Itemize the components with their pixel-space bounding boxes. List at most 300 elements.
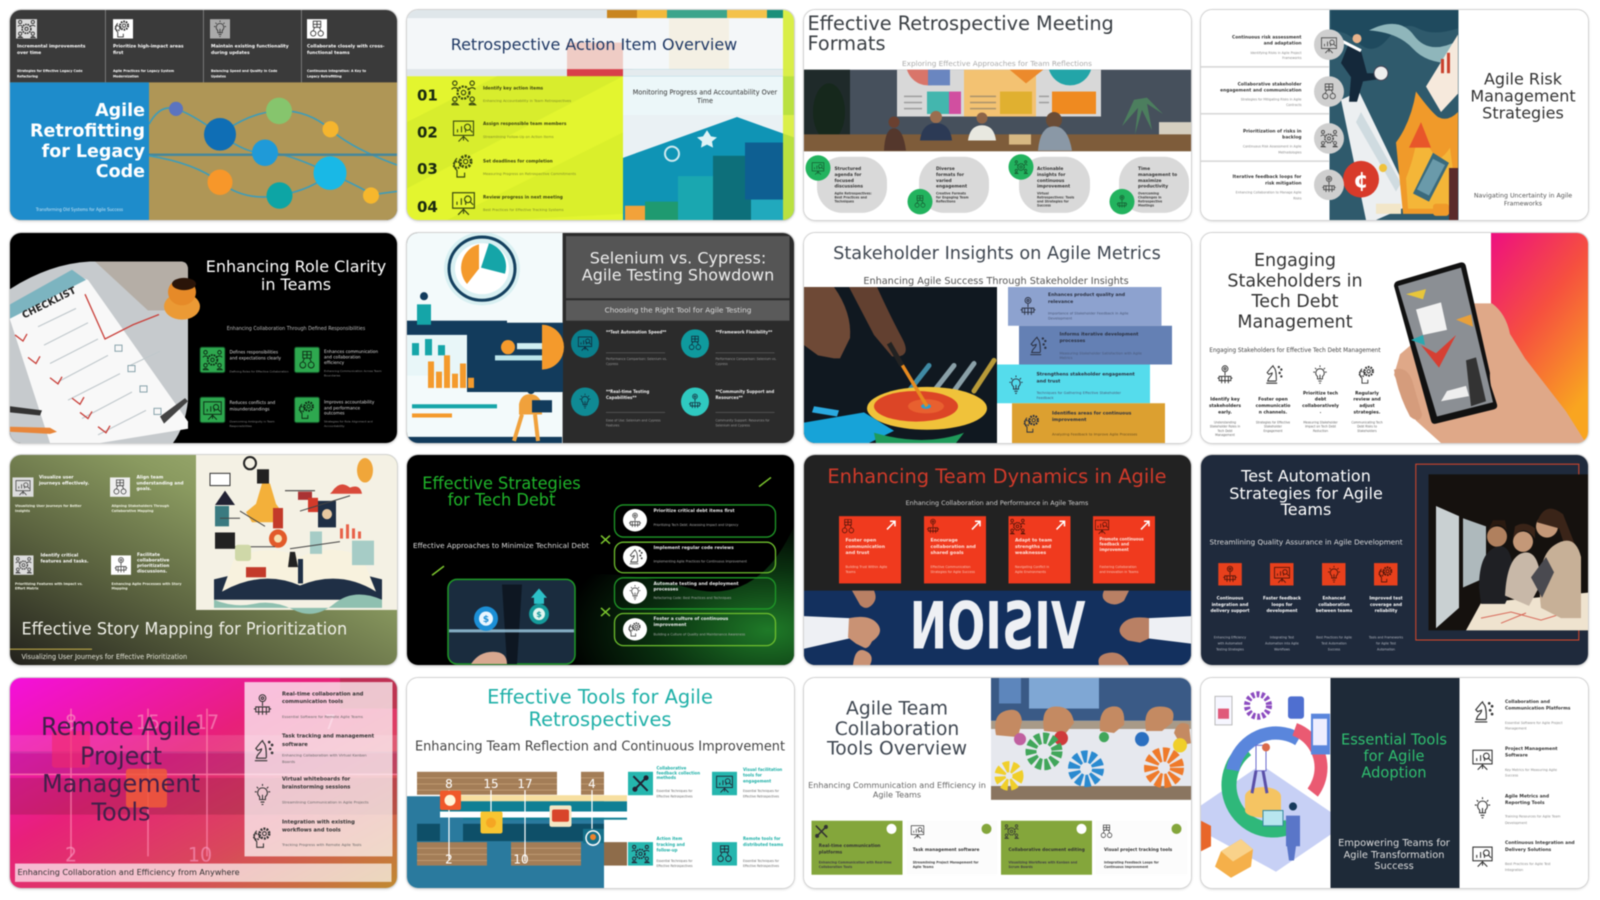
list: retrospective tools: Effective Retrospectives	[656, 794, 693, 798]
section: comparison points: Community Support: Resources for	[716, 418, 770, 422]
section: four format cards: insights for	[1037, 172, 1066, 178]
section: collaboration tool cards: Real-time communication	[819, 843, 880, 849]
list: risk strategies: Enhancing Collaboration to Manage Agile	[1236, 190, 1302, 195]
list: debt strategies: Automate testing and deployment	[653, 581, 740, 587]
section: collaboration tool cards: Collaboration Tools	[819, 865, 852, 869]
list: tool categories: Key Metrics for Measuring Agile	[1505, 767, 1557, 771]
list: risk strategies: Strategies for Mitigating Risks in Agile	[1241, 98, 1302, 102]
section: team dynamics cards: improvement	[1100, 547, 1129, 552]
list: insight blocks: and trust	[1036, 378, 1061, 384]
section: four format cards: management to	[1138, 172, 1177, 178]
callout: monitoring progress	[623, 76, 783, 115]
section: comparison points: **Test Automation Speed**	[606, 329, 667, 334]
section: automation benefits: Test Automation	[1320, 642, 1347, 646]
title panel: Empowering Teams for	[1338, 838, 1451, 849]
list: tool categories	[1473, 698, 1575, 872]
list: risk strategies: and adaptation	[1264, 41, 1302, 47]
title: Tech Debt	[1251, 291, 1339, 311]
title panel: for Agile	[1363, 747, 1425, 765]
section: automation benefits	[1210, 563, 1403, 652]
list: remote tools	[244, 682, 392, 856]
list: tool categories: Project Management	[1505, 745, 1558, 751]
section: engagement steps: n channels.	[1259, 409, 1288, 415]
title	[422, 474, 581, 509]
list: story mapping practices: features and tasks.	[40, 559, 89, 565]
section: team dynamics cards: Navigating Conflict in	[1015, 565, 1049, 569]
list: story mapping practices: Insights	[15, 509, 30, 513]
panel: Agile Risk Management Strategies	[1201, 10, 1588, 220]
list: debt strategies: Foster a culture of continuous	[653, 616, 729, 622]
list: story mapping practices: journeys effectively.	[38, 481, 89, 487]
list: remote tools: Virtual whiteboards for	[282, 776, 351, 782]
section: collaboration tool cards	[812, 820, 1187, 874]
section: team dynamics cards: Teams	[845, 570, 856, 574]
list: story mapping practices: Prioritizing Features with Impact vs.	[15, 582, 83, 586]
subtitle: Enhancing Agile Success Through Stakeholder Insights	[863, 275, 1129, 286]
list: debt strategies	[614, 505, 776, 646]
section: responsibilities grid: Defines responsibilities	[230, 349, 278, 354]
list: story mapping practices: Identify critical	[40, 552, 79, 558]
chart: connected nodes	[149, 98, 397, 209]
panel: Engaging Stakeholders in Tech Debt Management	[1201, 232, 1588, 442]
title: Strategies for Agile	[1229, 484, 1383, 503]
section: responsibilities grid: Improves accountability	[324, 399, 375, 404]
title: Management	[1237, 312, 1353, 332]
list: tool categories: Development	[1505, 820, 1528, 824]
list: remote tools: software	[282, 741, 308, 747]
list: story mapping practices: Aligning Stakeholders Through	[112, 504, 170, 508]
list: retrospective tools: Effective Retrospectives	[656, 863, 693, 867]
section: team dynamics cards: shared goals	[930, 550, 964, 556]
title: Teams	[1280, 500, 1331, 519]
list: insight blocks: Analyzing Feedback to Improve Agile Processes	[1052, 432, 1137, 436]
title: Collaboration	[835, 717, 959, 740]
list: story mapping practices: understanding and	[136, 481, 184, 487]
title panel: Adoption	[1361, 764, 1427, 781]
photo: mirrored vision board with hands	[804, 589, 1191, 665]
section: collaboration tool cards: Continuous Improvement	[1104, 865, 1149, 869]
section: responsibilities grid: Strategies for Role Alignment and	[324, 419, 373, 423]
photo: 3D bars	[623, 69, 794, 220]
section: collaboration tool cards: Streamlining Project Management for	[913, 860, 979, 864]
title	[1229, 466, 1383, 519]
title panel: Code	[96, 162, 145, 182]
section: four format cards: Best Practices and	[834, 196, 867, 200]
section: responsibilities grid: efficiency	[324, 359, 345, 365]
subtitle: Visualizing User Journeys for Effective Prioritization	[21, 653, 187, 661]
section: automation benefits: Enhancing Efficiency	[1214, 635, 1246, 640]
list: risk strategies: Methodologies	[1278, 151, 1302, 155]
list: risk strategies: risk mitigation	[1265, 180, 1302, 186]
photo: finance icons on suit	[448, 579, 575, 664]
section: responsibilities grid: and performance	[324, 405, 360, 410]
list: risk strategies: Contracts	[1286, 103, 1302, 107]
list: insight blocks: Measuring Stakeholder Satisfaction with Agile	[1059, 351, 1143, 355]
list: story mapping practices: Enhancing Agile Processes with Story	[112, 582, 182, 586]
section: key practices strip: during updates	[211, 50, 250, 56]
list: retrospective tools: engagement	[743, 778, 771, 783]
section: key practices strip: Incremental improvements	[17, 44, 86, 50]
title: Management	[42, 769, 200, 798]
section: collaboration tool cards: Scrum Boards	[1008, 865, 1033, 869]
section: key practices strip: Strategies for Effective Legacy Code	[17, 69, 83, 73]
section: automation benefits: with Automated	[1218, 642, 1242, 646]
section: responsibilities grid: Defining Roles for Effective Collaboration	[230, 369, 289, 373]
section: responsibilities grid: Enhancing Communication Across Team	[324, 369, 382, 373]
section: engagement steps: Impact on Tech Debt	[1305, 424, 1337, 428]
section: team dynamics cards: collaboration and	[930, 544, 976, 550]
list: retrospective tools: tools for	[743, 772, 762, 777]
illustration: risk collage	[1330, 10, 1458, 220]
section: automation benefits: Enhanced	[1323, 596, 1345, 601]
section: responsibilities grid: and expectations clearly	[230, 355, 282, 360]
list: story mapping practices: collaborative	[137, 557, 169, 564]
section: comparison points: **Framework Flexibility**	[716, 329, 773, 334]
subtitle panel	[566, 300, 790, 320]
list: retrospective tools: Action item	[656, 836, 682, 841]
section: four format cards: engagement	[936, 183, 968, 189]
gradient accent	[1491, 232, 1588, 442]
section: responsibilities grid: and collaboration	[324, 354, 361, 359]
illustration: analyst and dashboards	[407, 231, 564, 442]
section: four format cards: Time	[1138, 166, 1150, 172]
section: four format cards: Retrospective	[1138, 200, 1162, 204]
list: retrospective tools: tracking and	[656, 841, 685, 847]
list: tool categories: Training Resources for Agile Team	[1504, 814, 1560, 818]
section: engagement steps: communicatio	[1256, 402, 1290, 408]
section: team dynamics cards: Fostering Collaboration	[1100, 565, 1137, 569]
list: story mapping practices: Facilitate	[137, 552, 160, 558]
list: risk strategies: Frameworks	[1282, 56, 1302, 60]
illustration: checklist on desk	[10, 261, 200, 442]
section: engagement steps: Identify key	[1210, 396, 1240, 402]
panel: Selenium vs. Cypress	[407, 232, 794, 442]
title panel: Essential Tools	[1341, 731, 1447, 748]
timeline graphic: 10	[513, 852, 529, 866]
title	[1470, 69, 1576, 123]
section: four format cards: formats for	[936, 172, 965, 178]
list: retrospective tools: Essential Techniques for	[743, 789, 780, 793]
title band: Retrospective Action Item Overview	[451, 35, 737, 54]
section: comparison points: Cypress	[716, 361, 728, 366]
section: four format cards: improvement	[1037, 183, 1071, 189]
section: responsibilities grid: Enhances communication	[324, 348, 378, 353]
title: Tools Overview	[826, 737, 967, 759]
photo: finance icons on suit: $	[536, 610, 542, 619]
list: remote tools: Task tracking and management	[282, 733, 375, 739]
title: Effective Tools for Agile	[487, 685, 713, 708]
section: automation benefits: for Agile Test	[1376, 642, 1397, 646]
background: timeline pattern: 8	[65, 710, 77, 734]
list: tool categories: Integration	[1505, 868, 1523, 872]
list: risk strategies: Collaborative stakeholder	[1238, 81, 1302, 87]
panel: Retrospective Action Item Overview	[407, 10, 794, 220]
title: Management	[1470, 87, 1576, 106]
panel: Stakeholder Insights on Agile Metrics	[804, 232, 1191, 442]
list: remote tools: brainstorming sessions	[282, 784, 350, 790]
list: story mapping practices: Align team	[136, 474, 164, 480]
list: story mapping practices: Visualize user	[39, 474, 74, 480]
section: four format cards: continuous	[1037, 178, 1065, 184]
title: Effective Story Mapping for Prioritization	[21, 619, 347, 638]
section: four format cards: Techniques	[834, 200, 854, 204]
section: key practices strip: functional teams	[307, 50, 350, 56]
section: team dynamics cards: Promote continuous	[1100, 537, 1144, 542]
subtitle	[808, 780, 986, 799]
list: tool categories: Reporting Tools	[1505, 799, 1545, 805]
illustration: open book of ideas	[196, 455, 397, 614]
panel: Effective Strategies for Tech Debt	[407, 455, 794, 665]
section: collaboration tool cards: Task management software	[913, 846, 979, 852]
title: Strategies	[1482, 103, 1564, 123]
list: debt strategies: Prioritizing Tech Debt: Assessing Impact and Urgency	[653, 523, 738, 527]
caption strip: Enhancing Collaboration and Efficiency from Anywhere	[18, 867, 240, 877]
list: action items: 02	[417, 123, 438, 141]
section: four format cards: focused	[834, 178, 854, 184]
list: retrospective tools: Effective Retrospectives	[743, 863, 779, 867]
section: engagement steps: Management	[1215, 432, 1236, 436]
list: retrospective tools: follow-up	[656, 847, 678, 852]
photo: finance icons on suit: $	[483, 615, 489, 625]
section: team dynamics cards: weaknesses	[1015, 550, 1046, 556]
background: timeline pattern	[10, 678, 397, 866]
background: timeline pattern: 2	[65, 843, 77, 866]
list: debt strategies: processes	[653, 587, 679, 593]
section: four format cards: Diverse	[936, 166, 955, 172]
section: four format cards: and Strategies for	[1037, 200, 1069, 204]
title: Retrospectives	[528, 707, 672, 730]
title panel	[1330, 678, 1460, 888]
list: retrospective tools: Essential Techniques for	[656, 858, 693, 863]
background: timeline pattern: 17	[195, 710, 219, 734]
section: comparison points: Features	[606, 423, 620, 427]
list: retrospective tools: Remote tools for	[743, 836, 781, 841]
list: story mapping practices: Collaborative Mapping	[112, 509, 154, 513]
title	[41, 712, 201, 826]
title: for Tech Debt	[448, 490, 556, 509]
section: team dynamics cards: Agile Environments	[1015, 570, 1046, 574]
section: engagement steps: Prioritize tech	[1303, 390, 1338, 396]
list: action items: Identify key action items	[483, 85, 544, 92]
list: remote tools: Tracking Progress with Remote Agile Tools	[281, 842, 361, 847]
title	[206, 257, 387, 294]
section: engagement steps: Measuring Stakeholder	[1303, 420, 1338, 424]
section: key practices strip: Refactoring	[17, 74, 39, 78]
title: in Teams	[261, 274, 331, 294]
subtitle: Enhancing Communication and Efficiency in	[808, 780, 986, 790]
illustration: isometric growth ring	[1201, 694, 1336, 877]
list: action items: 01	[417, 87, 438, 105]
section: engagement steps: Stakeholders	[1357, 428, 1377, 432]
title panel: Retrofitting	[30, 121, 145, 141]
list: insight blocks: Informs iterative development	[1059, 331, 1139, 337]
background: timeline pattern: 15	[136, 710, 160, 734]
section: automation benefits: Automation	[1377, 648, 1395, 652]
section: automation benefits: Success	[1328, 648, 1341, 652]
illustration: hand holding phone	[1394, 262, 1586, 442]
subtitle: Navigating Uncertainty in Agile	[1474, 193, 1572, 200]
list: insight blocks: Development	[1048, 316, 1073, 320]
section: engagement steps: Regularly	[1355, 390, 1379, 396]
section: four format cards: maximize	[1138, 178, 1162, 184]
title: Effective Retrospective Meeting	[808, 12, 1114, 35]
section: engagement steps: Communicating Tech	[1351, 420, 1383, 424]
list: tool categories: Agile Metrics and	[1505, 793, 1549, 799]
photo frame	[1416, 464, 1579, 640]
list: action items: Measuring Progress on Retrospective Commitments	[483, 172, 576, 176]
section: engagement steps: Foster open	[1258, 396, 1288, 402]
section: engagement steps: Reduction	[1313, 428, 1328, 432]
title band	[407, 18, 783, 69]
section: comparison points: Selenium and Cypress	[716, 423, 750, 427]
title panel: for Legacy	[42, 142, 145, 162]
section: automation benefits: Tools and Frameworks	[1368, 635, 1403, 640]
list: risk strategies: backlog	[1282, 134, 1302, 140]
section: engagement steps: .	[1320, 409, 1322, 414]
list: risk strategies: Continuous risk assessment	[1232, 35, 1302, 41]
panel: Test Automation Strategies for Agile Teams	[1201, 455, 1588, 665]
title panel	[10, 82, 149, 220]
photo: team at smart table	[1428, 474, 1588, 630]
timeline graphic: 15	[483, 776, 499, 791]
section: key practices strip: Prioritize high-impact areas	[113, 44, 184, 50]
list: insight blocks: improvement	[1052, 417, 1087, 423]
list: remote tools: Real-time collaboration and	[282, 691, 364, 697]
section: four format cards: Agile Retrospectives:	[834, 191, 872, 196]
list: insight blocks	[997, 287, 1172, 442]
title	[808, 12, 1114, 55]
subtitle: Enhancing Collaboration Through Defined Responsibilities	[227, 325, 366, 331]
list: tool categories: Communication Platforms	[1505, 705, 1571, 711]
section: engagement steps: Strategies for Effective	[1256, 420, 1290, 424]
photo: meeting room	[803, 68, 1192, 152]
list: story mapping practices: prioritization	[137, 563, 169, 569]
section: four format cards: Reflections	[936, 200, 956, 204]
list: story mapping practices: discussions.	[137, 569, 167, 575]
background glow	[537, 526, 794, 665]
section: team dynamics cards: feedback and	[1100, 542, 1129, 547]
list: insight blocks: Enhances product quality and	[1048, 292, 1125, 298]
section: engagement steps: Debt Risks to	[1357, 424, 1377, 428]
section: automation benefits: delivery support	[1210, 608, 1250, 613]
list: story mapping practices: goals.	[136, 486, 152, 492]
section: team dynamics cards: Building Trust Within Agile	[845, 565, 887, 569]
title: Remote Agile	[41, 712, 201, 741]
section: engagement steps: Engagement	[1263, 428, 1283, 432]
panel: Effective Tools for Agile Retrospectives	[407, 678, 794, 888]
panel: Agile Retrofitting for Legacy Code	[10, 10, 397, 220]
subtitle: Engaging Stakeholders for Effective Tech Debt Management	[1209, 347, 1381, 353]
title: Effective Strategies	[422, 474, 581, 493]
title: Enhancing Team Dynamics in Agile	[827, 465, 1167, 488]
list: risk strategies: Identifying Risks in Agile Project	[1250, 51, 1302, 55]
timeline graphic: 8	[445, 776, 453, 791]
timeline graphic: 2	[445, 852, 453, 866]
section: collaboration tool cards: Visual project tracking tools	[1104, 846, 1173, 852]
title: Stakeholder Insights on Agile Metrics	[833, 242, 1161, 264]
list: debt strategies: Implement regular code reviews	[653, 545, 734, 551]
list: tool categories: Collaboration and	[1505, 698, 1550, 704]
section: key practices strip: Continuous Integration: A Key to	[307, 69, 367, 73]
section: engagement steps: adjust	[1359, 402, 1376, 408]
photo: hand pointing at target chart	[804, 287, 997, 442]
section: key practices strip	[16, 10, 385, 82]
list: retrospective tools: Effective Retrospectives	[743, 794, 779, 798]
section: four format cards: Retrospectives: Tools	[1037, 196, 1074, 200]
subtitle: Frameworks	[1504, 201, 1542, 208]
section: comparison points: Resources**	[716, 395, 744, 400]
section: engagement steps: review and	[1353, 396, 1381, 402]
section: comparison points: **Real-time Testing	[606, 389, 649, 394]
section: responsibilities grid: Reduces conflicts and	[230, 400, 276, 405]
section: engagement steps: debt	[1315, 396, 1327, 402]
section: team dynamics cards: communication	[845, 544, 885, 550]
section: four format cards: Actionable	[1037, 166, 1063, 172]
list: story mapping practices	[12, 474, 184, 591]
list: retrospective tools: Collaborative	[656, 765, 687, 770]
section: responsibilities grid	[200, 347, 382, 428]
section: responsibilities grid: Responsibilities	[230, 424, 252, 428]
section: responsibilities grid: misunderstandings	[230, 406, 270, 411]
section: responsibilities grid: Accountability	[324, 424, 345, 428]
title: Enhancing Role Clarity	[206, 257, 387, 276]
list: insight blocks: Feedback	[1036, 396, 1054, 400]
list: retrospective tools: feedback collection	[656, 770, 700, 775]
caption strip	[15, 863, 392, 881]
list: risk strategies: Prioritization of risks in	[1243, 128, 1302, 134]
title panel: Agile Transformation	[1344, 849, 1444, 860]
list: action items: Enhancing Accountability in Team Retrospectives	[483, 99, 571, 103]
section: team dynamics cards: strengths and	[1015, 544, 1051, 550]
list: tool categories: Success	[1505, 773, 1519, 777]
section: responsibilities grid: Boundaries	[324, 373, 341, 377]
panel: Essential Tools for Agile Adoption	[1201, 678, 1588, 888]
list: risk strategies	[1201, 29, 1344, 201]
section: engagement steps: strategies.	[1354, 409, 1381, 415]
section: four format cards: Meetings	[1138, 204, 1154, 208]
callout: monitoring progress: Monitoring Progress and Accountability Over	[633, 89, 778, 97]
list: insight blocks: processes	[1059, 338, 1086, 344]
list: retrospective tools	[628, 765, 784, 867]
title: Stakeholders in	[1227, 271, 1363, 291]
photo: hands arranging gears	[991, 678, 1191, 799]
section: automation benefits: Workflows	[1274, 648, 1290, 652]
list: action items: Best Practices for Effective Tracking Systems	[483, 208, 564, 212]
subtitle panel: Choosing the Right Tool for Agile Testing	[605, 305, 751, 314]
section: team dynamics cards: Encourage	[930, 538, 958, 544]
section: automation benefits: Testing Strategies	[1215, 648, 1244, 652]
section: automation benefits: Automation into Agile	[1265, 642, 1299, 646]
section: key practices strip: over time	[17, 50, 41, 56]
list: retrospective tools: Essential Techniques for	[743, 858, 780, 863]
section: key practices strip: Balancing Speed and Quality in Code	[211, 69, 278, 73]
list: action items: 04	[417, 198, 438, 216]
title: Project	[80, 742, 162, 770]
section: engagement steps: early.	[1218, 409, 1232, 415]
list: risk strategies: Iterative feedback loops for	[1233, 174, 1302, 180]
panel: Agile Team Collaboration Tools Overview	[804, 678, 1191, 888]
list: debt strategies: Implementing Agile Practices for Continuous Improvement	[653, 560, 748, 564]
section: key practices strip: first	[113, 50, 124, 56]
section: team dynamics cards: and Innovation in Teams	[1100, 570, 1139, 574]
list: insight blocks: relevance	[1048, 298, 1073, 304]
section: key practices strip: Legacy Retrofitting	[307, 74, 342, 78]
section: four format cards: agenda for	[834, 172, 862, 178]
section: team dynamics cards: and trust	[845, 550, 870, 556]
section: team dynamics cards: Adapt to team	[1015, 538, 1052, 544]
section: collaboration tool cards: Enhancing Communication with Real-time	[819, 860, 892, 864]
section: automation benefits: Continuous	[1217, 596, 1244, 601]
